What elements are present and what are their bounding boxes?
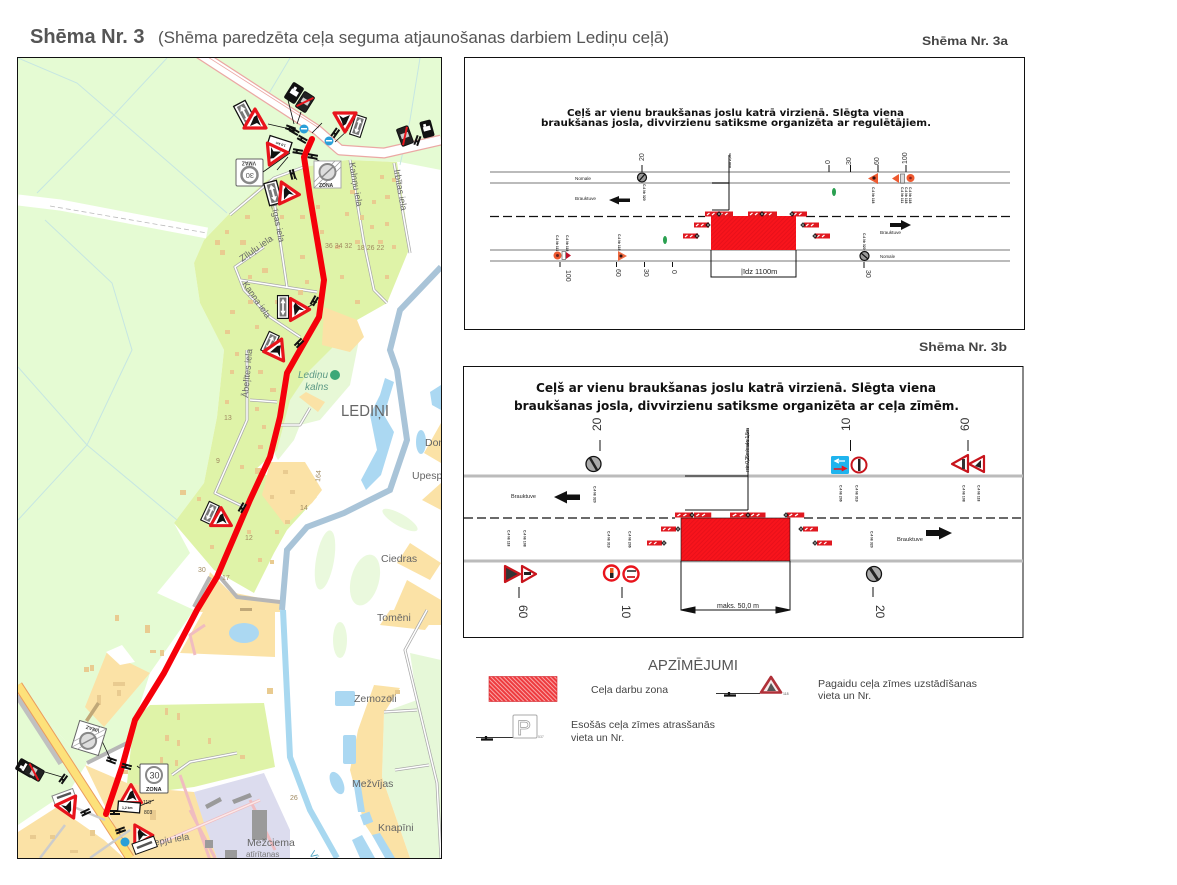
road labels: Mežvījas bbox=[352, 778, 393, 790]
scheme 3b distances: C.4 Nr 319 bbox=[854, 485, 858, 502]
sign: 30 zone end north bbox=[236, 153, 290, 186]
road labels: LEDIŅI bbox=[341, 403, 389, 420]
page title bbox=[30, 26, 669, 48]
map signs: south junction: 1,2 km bbox=[122, 806, 133, 810]
scheme 3a labels: Brauktuve bbox=[575, 196, 597, 201]
scheme 3b dimensions bbox=[681, 428, 790, 613]
scheme 3b signs top bbox=[586, 440, 984, 474]
scheme 3a dimensions: min 2,5m bbox=[728, 153, 732, 168]
forest cuts bbox=[18, 58, 420, 520]
sign: 30 zone end north: 30 bbox=[246, 171, 254, 180]
road labels: 12 bbox=[245, 535, 253, 542]
scheme 3a distances bbox=[555, 152, 912, 282]
map border bbox=[18, 58, 442, 858]
map signs: south junction bbox=[15, 741, 157, 854]
road labels: Ciedras bbox=[381, 553, 417, 565]
residential area bbox=[174, 160, 410, 593]
scheme 3b distances: C.4 Nr 206 bbox=[838, 485, 842, 502]
scheme 3b distances: C.4 Nr 118 bbox=[506, 530, 510, 547]
legend: existing sign label bbox=[571, 719, 715, 744]
map signs: south junction: 803 bbox=[144, 810, 153, 816]
yellow-green field bbox=[127, 703, 275, 790]
scheme 3b title: braukšanas josla, divvirzienu satiksme organizēta ar ceļa zīmēm. bbox=[514, 398, 959, 413]
road labels: 17 bbox=[222, 575, 230, 582]
road labels: Mežciema bbox=[247, 837, 295, 849]
scheme 3a title bbox=[541, 107, 931, 129]
scheme 3a dimensions bbox=[711, 153, 796, 277]
scheme 3a work zone bbox=[711, 216, 796, 250]
scheme 3a dimensions: |īdz 1100m bbox=[741, 267, 777, 276]
legend: work zone label: Ceļa darbu zona bbox=[591, 684, 668, 696]
scheme 3b distances: C.4 Nr 320 bbox=[870, 531, 874, 548]
scheme 3a title: braukšanas josla, divvirzienu satiksme organizēta ar regulētājiem. bbox=[541, 117, 931, 129]
orange building zones bbox=[18, 307, 441, 858]
scheme 3a direction arrows bbox=[609, 196, 911, 230]
scheme 3a distances: C.4 Nr 111 bbox=[900, 187, 904, 203]
river bbox=[282, 267, 441, 610]
road labels: kalns bbox=[305, 382, 328, 393]
road labels: 18 26 22 bbox=[357, 245, 384, 252]
scheme 3a signs bbox=[554, 165, 914, 268]
legend: existing sign icon bbox=[476, 715, 544, 740]
legend: temporary sign label: Pagaidu ceļa zīmes uzstādīšanas bbox=[818, 678, 977, 690]
scheme 3a labels: Nomale bbox=[880, 254, 895, 259]
legend: existing sign label: Esošās ceļa zīmes atrasšanās bbox=[571, 719, 715, 731]
scheme 3b distances: 60 bbox=[958, 417, 972, 431]
white forest path bbox=[18, 200, 207, 233]
faint green blobs bbox=[311, 505, 420, 658]
sign: 30 zone end south: VMAZ bbox=[85, 723, 101, 733]
road labels: 36 34 32 bbox=[325, 243, 352, 250]
road labels: atīrītanas bbox=[246, 850, 279, 859]
road labels: Zemozoli bbox=[354, 693, 397, 705]
legend: temporary sign label: vieta un Nr. bbox=[818, 690, 871, 702]
scheme 3a distances: C.4 Nr 118 bbox=[565, 235, 569, 252]
road labels: Tomēni bbox=[377, 612, 411, 624]
scheme 3a labels: Brauktuve bbox=[880, 230, 902, 235]
road labels: 164 bbox=[315, 470, 323, 482]
scheme 3b title bbox=[514, 380, 959, 413]
scheme 3b dimensions: maks. 50,0 m bbox=[717, 601, 759, 610]
scheme 3b distances: C.4 Nr 108 bbox=[962, 485, 966, 502]
scheme 3a distances: 30 bbox=[864, 270, 871, 278]
road labels: Kaņna iela bbox=[240, 279, 273, 320]
scheme 3b distances: 20 bbox=[873, 605, 887, 619]
sign: 30 zone end north: VMAZ bbox=[242, 160, 256, 166]
sign: zone end north bbox=[314, 161, 341, 189]
road labels: Līgas iela bbox=[269, 203, 287, 243]
panel: scheme 3b bbox=[464, 366, 1023, 638]
scheme 3b direction arrows bbox=[554, 491, 952, 540]
scheme 3b labels: Brauktuve bbox=[511, 494, 536, 500]
scheme 3a distances: C.4 Nr 111 bbox=[555, 235, 559, 251]
road labels: Virs bbox=[306, 849, 325, 869]
road labels: Upesp bbox=[412, 470, 443, 482]
road labels: Knapīni bbox=[378, 822, 414, 834]
sign: 30 zone south: ZONA bbox=[146, 787, 162, 793]
road labels: 9 bbox=[216, 458, 220, 465]
scheme 3a distances: C.4 Nr 118 bbox=[617, 234, 621, 251]
streets bbox=[18, 52, 441, 860]
road labels: Lediņu bbox=[298, 370, 328, 381]
road labels: Ziepju iela bbox=[146, 831, 191, 850]
scheme 3b distances: C.4 Nr 108 bbox=[522, 530, 526, 547]
legend: temporary sign icon: 118 bbox=[783, 692, 789, 696]
legend: work zone swatch bbox=[489, 676, 557, 702]
road labels: Dom bbox=[425, 437, 447, 449]
road labels: 13 bbox=[224, 415, 232, 422]
sign: 30 zone end south bbox=[72, 721, 106, 755]
road labels bbox=[146, 162, 447, 869]
legend: temporary sign icon bbox=[716, 677, 789, 696]
legend: existing sign label: vieta un Nr. bbox=[571, 732, 624, 744]
scheme 3b dimensions: min 0,25m/maks 1,5m bbox=[745, 428, 751, 472]
scheme 3a barriers bbox=[683, 211, 830, 239]
scheme 3b distances: C.4 Nr 206 bbox=[628, 531, 632, 548]
scheme 3b distances: 20 bbox=[590, 417, 604, 431]
scheme 3a distances: 30 bbox=[846, 157, 853, 165]
scheme 3a labels bbox=[575, 176, 902, 259]
page title: Shēma Nr. 3 bbox=[30, 26, 145, 48]
legend: existing sign icon: P bbox=[517, 717, 531, 740]
scheme 3a labels: Nomale bbox=[575, 176, 592, 181]
scheme 3a distances: 0 bbox=[825, 160, 832, 164]
red road section bbox=[106, 139, 324, 814]
sign: 30 zone south: 30 bbox=[150, 770, 160, 780]
legend bbox=[476, 658, 977, 744]
scheme 3a distances: 60 bbox=[614, 269, 621, 277]
scheme 3a distances: 30 bbox=[642, 269, 649, 277]
road labels: Ābeļītes iela bbox=[240, 348, 254, 398]
sign: zone end north: ZONA bbox=[319, 183, 334, 189]
scheme 3a distances: C.4 Nr 118 bbox=[871, 187, 875, 204]
scheme 3b road bbox=[464, 476, 1023, 561]
legend: existing sign icon: 537 bbox=[538, 735, 544, 739]
scheme 3b distances: 10 bbox=[619, 605, 633, 619]
map signs: north junction: 1,5 km bbox=[275, 141, 286, 148]
scheme 3b distances bbox=[506, 417, 980, 619]
scheme 3a distances: 20 bbox=[639, 153, 646, 161]
road labels: Zīļuļu iela bbox=[237, 233, 275, 264]
scheme 3b distances: 10 bbox=[839, 417, 853, 431]
road labels: 26 bbox=[290, 795, 298, 802]
scheme 3a distances: C.4 Nr 118 bbox=[904, 187, 908, 204]
scheme 3a distances: C.4 Nr 118 bbox=[908, 187, 912, 204]
house spots bbox=[30, 175, 400, 853]
scheme 3a distances: C.4 Nr 320 bbox=[862, 233, 866, 250]
scheme 3a distances: 100 bbox=[902, 152, 909, 164]
road labels: Irbītas iela bbox=[392, 169, 409, 211]
scheme 3b work zone bbox=[681, 518, 790, 561]
legend: temporary sign label bbox=[818, 678, 977, 702]
scheme 3b title: Ceļš ar vienu braukšanas joslu katrā virzienā. Slēgta viena bbox=[536, 380, 936, 395]
scheme 3a road bbox=[490, 172, 1010, 261]
scheme 3b labels bbox=[511, 494, 923, 543]
scheme 3a distances: 0 bbox=[670, 270, 677, 274]
ponds bbox=[229, 378, 441, 858]
road labels: 30 bbox=[198, 567, 206, 574]
page title: (Shēma paredzēta ceļa seguma atjaunošanas darbiem Lediņu ceļā) bbox=[158, 29, 669, 47]
scheme 3a title: Ceļš ar vienu braukšanas joslu katrā virzienā. Slēgta viena bbox=[567, 107, 904, 119]
heading: scheme 3b: Shēma Nr. 3b bbox=[919, 340, 1007, 354]
sign: 30 zone south bbox=[140, 764, 168, 793]
panel: route map bbox=[18, 52, 447, 869]
panel: scheme 3a bbox=[464, 58, 1024, 330]
legend heading: APZĪMĒJUMI bbox=[648, 658, 738, 674]
scheme 3b distances: C.4 Nr 118 bbox=[976, 485, 980, 502]
map signs: south junction: 118 bbox=[143, 800, 151, 806]
scheme 3a distances: 100 bbox=[564, 270, 571, 282]
scheme 3a distances: 60 bbox=[874, 157, 881, 165]
road labels: 14 bbox=[300, 505, 308, 512]
scheme 3a distances: C.4 Nr 320 bbox=[642, 184, 646, 201]
scheme 3b labels: Brauktuve bbox=[897, 537, 923, 543]
scheme 3b distances: C.4 Nr 320 bbox=[592, 486, 596, 503]
road labels: Kalnņu iela bbox=[347, 162, 365, 207]
scheme 3b barriers bbox=[647, 512, 832, 546]
heading: scheme 3a: Shēma Nr. 3a bbox=[922, 34, 1008, 48]
scheme 3b signs bottom bbox=[505, 566, 882, 598]
scheme 3b distances: C.4 Nr 319 bbox=[606, 531, 610, 548]
scheme 3b distances: 60 bbox=[516, 605, 530, 619]
map signs: north junction bbox=[201, 82, 434, 526]
lavender campus bbox=[194, 773, 290, 858]
